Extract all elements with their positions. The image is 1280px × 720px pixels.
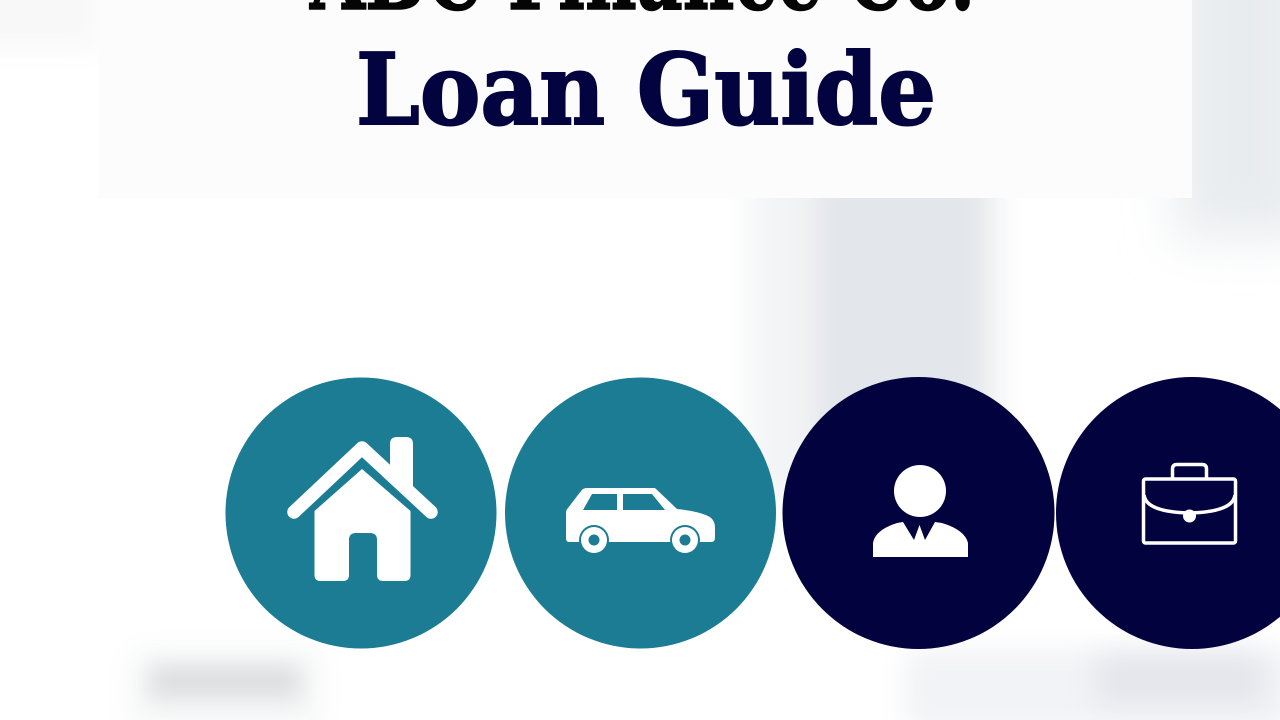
title: loan guide: Loan Guide [356, 33, 936, 148]
icon: house [294, 437, 431, 581]
title panel [98, 0, 1192, 198]
icon: person [873, 465, 968, 557]
personal loan circle [782, 377, 1054, 649]
business loan circle [1056, 377, 1280, 649]
auto loan circle [505, 378, 776, 648]
icon: car [566, 488, 715, 555]
home loan circle [226, 378, 496, 648]
icon: briefcase [1144, 464, 1236, 543]
